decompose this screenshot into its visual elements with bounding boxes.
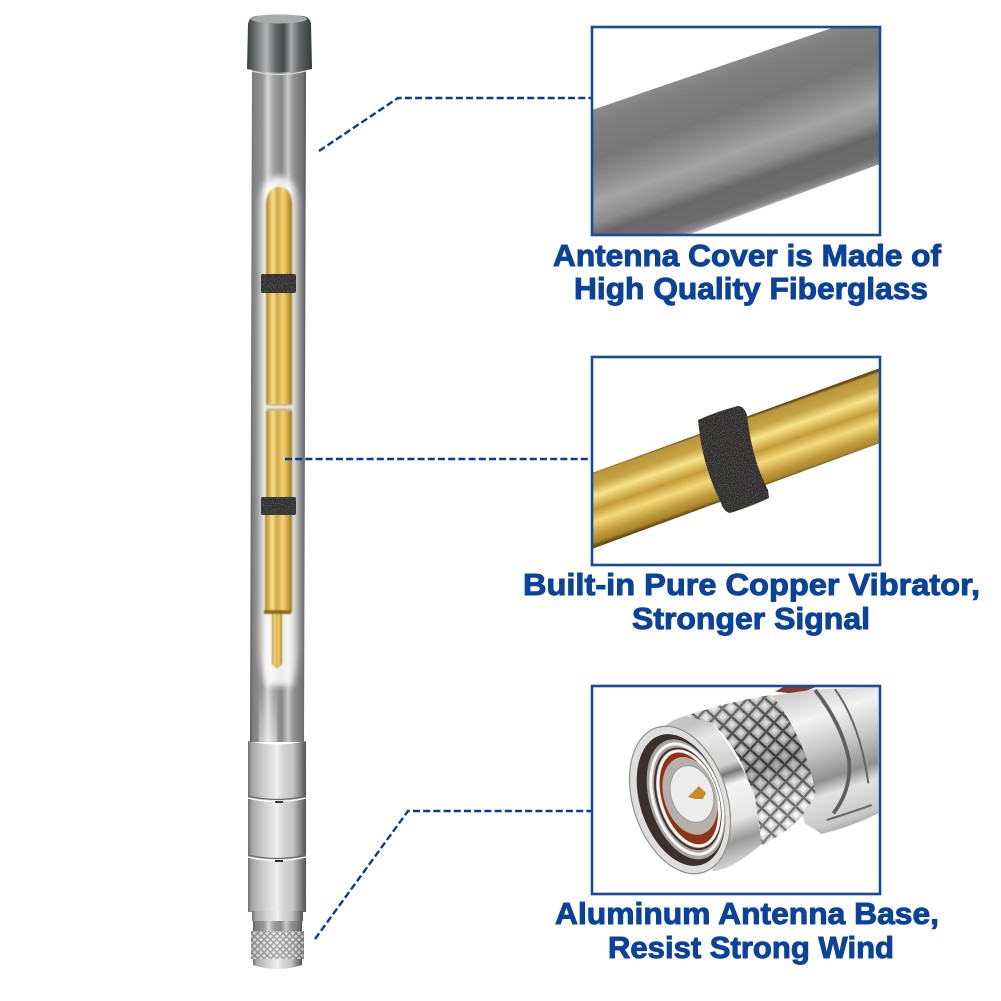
wires [775,687,816,693]
gray tube closeup [593,28,879,234]
panel: copper vibrator [592,357,880,565]
N connector [251,911,304,969]
panel: aluminum base connector [592,686,880,894]
caption: fiberglass cover: High Quality Fiberglass [574,271,928,306]
infographic canvas [247,14,978,969]
caption: copper vibrator: Stronger Signal [632,601,870,636]
aluminum base [248,741,306,912]
thread rings [646,739,726,860]
foam spacer lower [261,497,296,515]
gold pin tip [688,786,706,799]
copper vibrator [264,187,292,668]
inner cavity [636,734,726,866]
center contact [670,765,714,823]
rear body [765,687,878,834]
caption: fiberglass cover: Antenna Cover is Made of [553,238,942,273]
caption: copper vibrator: Built-in Pure Copper Vibrator, [523,567,980,602]
caption: aluminum base [555,896,939,965]
caption: fiberglass cover [553,238,942,306]
antenna illustration [247,14,312,969]
foam spacer upper [261,274,296,293]
leader line: vibrator [285,458,592,460]
leader line: base [315,811,592,939]
knurled ring [685,695,816,845]
caption: copper vibrator [523,567,980,636]
front sleeve [662,716,762,872]
translucent window glow [257,176,301,686]
panel: fiberglass cover [590,26,882,236]
caption: aluminum base: Resist Strong Wind [608,930,894,965]
top cap [247,14,312,74]
front rim [628,726,732,874]
leader line: cover [319,98,592,151]
lower tube sheen [259,670,277,742]
caption: aluminum base: Aluminum Antenna Base, [555,896,939,931]
gold rod closeup [592,368,880,549]
fiberglass tube [250,68,306,742]
connector rear and knurl [662,686,878,872]
foam ring [698,406,769,513]
